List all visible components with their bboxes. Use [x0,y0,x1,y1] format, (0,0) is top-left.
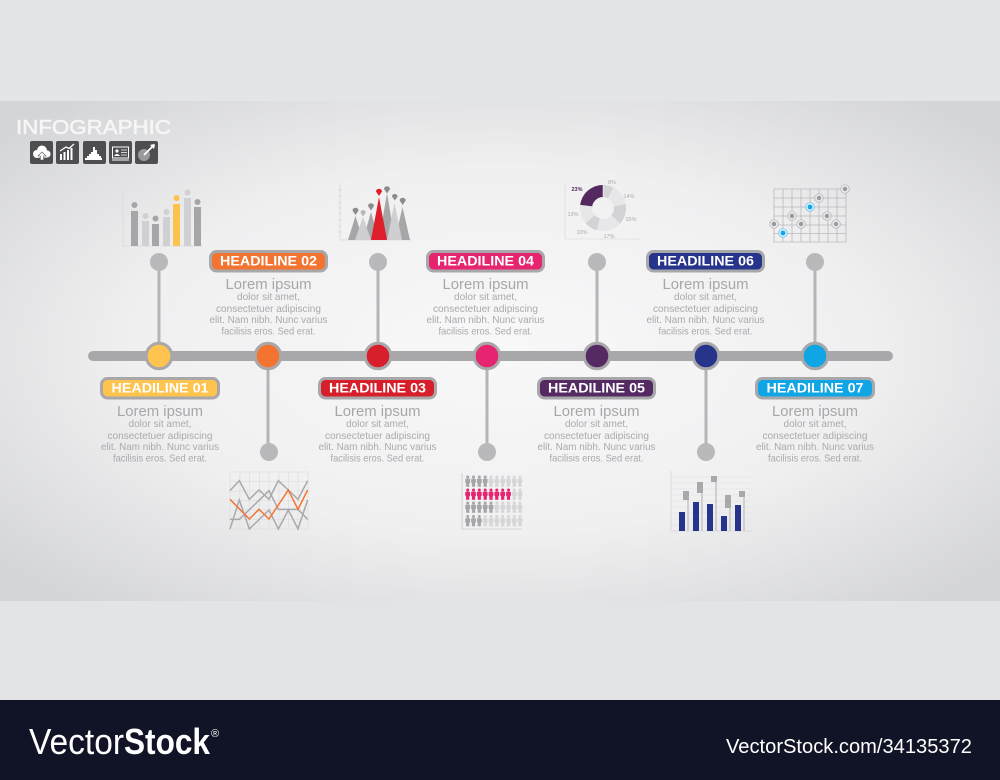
timeline bar [88,351,893,361]
text 06: facilisis eros. Sed erat. [658,326,752,338]
background: lower band [0,601,1000,700]
background: top band [0,0,1000,101]
text 01: elit. Nam nibh. Nunc varius [101,442,219,453]
text 06: consectetuer adipiscing [653,304,758,315]
text 04 [426,277,544,338]
text 07 [756,404,874,464]
headline 03 [320,378,436,398]
headline 04 [428,252,544,271]
icon: growth chart [56,141,79,164]
text 02: consectetuer adipiscing [216,304,321,315]
text 02: elit. Nam nibh. Nunc varius [210,315,328,326]
chart: donut [565,180,641,240]
text 07: elit. Nam nibh. Nunc varius [756,442,874,453]
connector 04 [478,356,496,461]
connector 05 [588,253,606,356]
footer logo: Stock [124,721,211,762]
text 01 [101,404,219,464]
connector 06 [697,356,715,461]
footer bar [0,700,1000,780]
icon: histogram [83,141,106,164]
text 03: elit. Nam nibh. Nunc varius [318,442,436,453]
text 02: dolor sit amet, [237,292,300,303]
chart: donut: 10% [576,230,588,236]
node 04 [474,343,500,369]
chart: navy bars with gray flags [671,471,753,531]
headline 05: HEADILINE 05 [548,380,645,396]
chart: donut: 8% [608,180,616,186]
headline 03: HEADILINE 03 [329,380,426,396]
step 07 [756,253,874,464]
footer logo: Vector [29,721,124,762]
text 03: consectetuer adipiscing [325,431,430,442]
text 05 [538,404,656,464]
text 05: consectetuer adipiscing [544,431,649,442]
icon: cloud upload [30,141,53,164]
node 06 [693,343,719,369]
chart: donut: 14% [623,194,635,200]
headline 07 [756,378,874,398]
text 06 [646,277,764,338]
background: main panel [0,101,1000,601]
connector 03 [369,253,387,356]
step 02 [210,252,328,461]
text 04: dolor sit amet, [454,292,517,303]
text 07: Lorem ipsum [772,404,858,420]
text 02: Lorem ipsum [226,277,312,293]
icon: id card [109,141,132,164]
text 06: Lorem ipsum [662,277,748,293]
headline 05 [538,378,654,398]
text 05: elit. Nam nibh. Nunc varius [538,442,656,453]
text 06: elit. Nam nibh. Nunc varius [646,315,764,326]
text 02: facilisis eros. Sed erat. [222,326,316,338]
headline 04: HEADILINE 04 [437,252,534,268]
connector 02 [260,356,278,461]
chart: people pictogram [462,473,522,529]
node 02 [255,343,281,369]
text 03 [318,404,436,464]
text 01: dolor sit amet, [128,419,192,430]
step 04 [426,252,544,461]
headline 06: HEADILINE 06 [657,252,754,268]
headline 07: HEADILINE 07 [766,380,864,396]
headline 01 [102,378,218,398]
headline 02: HEADILINE 02 [220,252,317,268]
text 07: facilisis eros. Sed erat. [768,454,862,464]
text 04: elit. Nam nibh. Nunc varius [426,315,544,326]
text 01: facilisis eros. Sed erat. [113,454,207,464]
text 05: facilisis eros. Sed erat. [550,454,644,464]
text 04: Lorem ipsum [442,277,528,293]
footer image id: VectorStock.com/34135372 [726,736,972,758]
text 02 [210,277,328,338]
text 01: consectetuer adipiscing [108,431,213,442]
connector 01 [150,253,168,356]
chart: donut: 13% [567,212,579,218]
chart: donut: 17% [603,234,615,240]
chart: bar chart with dots [123,190,203,246]
text 06: dolor sit amet, [674,292,737,303]
node 05 [584,343,610,369]
text 03: facilisis eros. Sed erat. [330,454,424,464]
text 07: consectetuer adipiscing [762,431,868,442]
text 03: dolor sit amet, [346,419,409,430]
chart: donut: 23% [571,187,583,193]
icon: target dart [135,141,158,164]
footer logo: ® [211,728,219,740]
connector 07 [806,253,824,356]
text 07: dolor sit amet, [784,419,846,430]
text 05: Lorem ipsum [554,404,640,420]
headline 02 [210,252,326,271]
node 01 [146,343,172,369]
chart: donut: 15% [625,217,637,223]
text 03: Lorem ipsum [334,404,420,420]
footer logo [29,721,219,762]
step 01 [101,253,219,464]
icon row [30,141,158,164]
step 05 [538,253,656,464]
node 07 [802,343,828,369]
step 03 [318,253,436,464]
title: INFOGRAPHIC [16,116,171,139]
chart: line chart [230,472,308,529]
step 06 [646,252,764,461]
text 04: facilisis eros. Sed erat. [438,326,532,338]
headline 01: HEADILINE 01 [112,380,209,396]
node 03 [365,343,391,369]
headline 06 [648,252,764,271]
text 01: Lorem ipsum [117,404,203,420]
text 04: consectetuer adipiscing [433,304,538,315]
chart: scatter plot [770,185,849,242]
chart: mountain peaks [338,184,411,240]
text 05: dolor sit amet, [565,419,628,430]
